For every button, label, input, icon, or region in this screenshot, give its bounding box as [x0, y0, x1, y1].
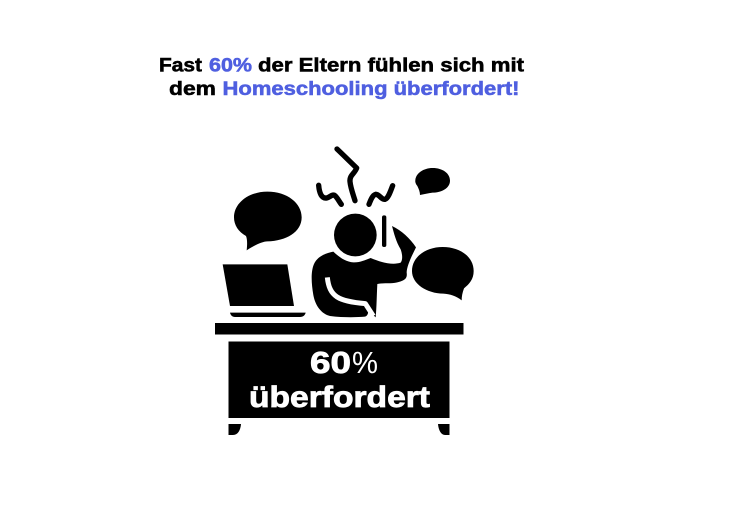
title: Homeschooling überfordert! [222, 78, 520, 100]
title [159, 54, 525, 100]
icon: right speech bubble [412, 247, 474, 300]
icon: laptop screen [223, 264, 294, 306]
desk drawer panel [228, 342, 450, 418]
drawer text: 60%: % [352, 346, 378, 380]
desk top [215, 323, 464, 334]
icon: stress lightning bolts [319, 149, 393, 204]
drawer text: 60%: 60 [310, 346, 351, 380]
title: der Eltern fühlen sich mit [258, 54, 525, 76]
desk leg right [438, 424, 450, 435]
desk leg left [228, 424, 241, 435]
title: dem [169, 78, 216, 100]
icon: body with raised arm [312, 226, 416, 317]
icon: top right speech bubble [415, 168, 450, 195]
icon: phone [382, 215, 386, 247]
icon: left speech bubble [234, 192, 302, 250]
drawer text: überfordert: überfordert [249, 381, 430, 414]
icon: head [334, 214, 377, 256]
title: 60% [209, 54, 252, 76]
illustration: overwhelmed parent at desk [223, 149, 474, 317]
icon: laptop base [230, 313, 306, 317]
title: Fast [159, 54, 203, 76]
